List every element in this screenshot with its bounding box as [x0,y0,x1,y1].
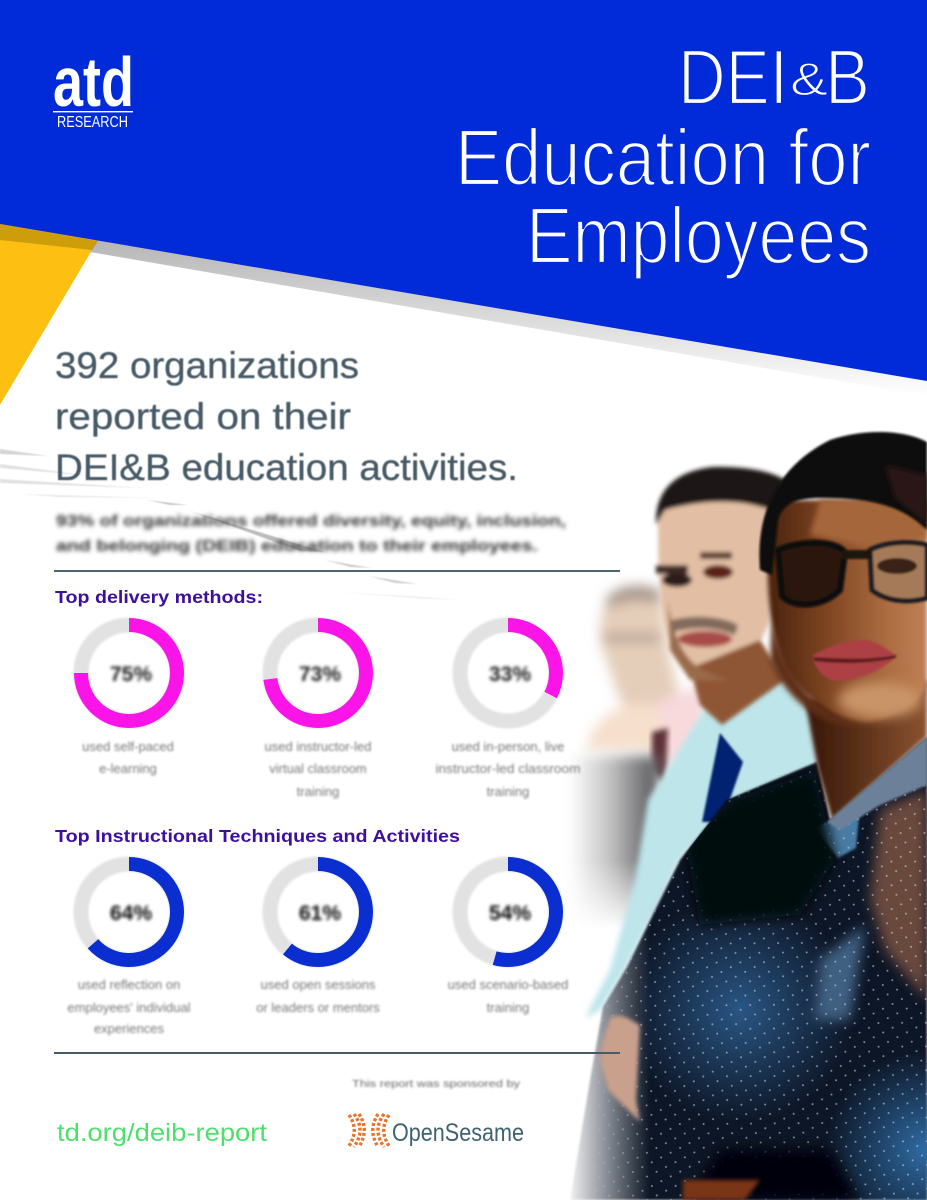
label: method 2: used instructor-led [265,739,371,754]
label: method 2 [265,739,371,799]
report url: td.org/deib-report [57,1119,267,1147]
donut: 61% [270,864,366,960]
label: technique 2 [256,977,380,1015]
title: & [790,53,828,105]
donut: 33% [460,625,556,721]
label: technique 3 [448,977,568,1015]
donut: 73%: 73% [299,663,341,686]
woman's lips [812,640,897,681]
title: Employees [526,191,871,280]
back man [585,585,708,770]
label: technique 2: or leaders or mentors [256,1000,380,1015]
donut: 33%: 33% [489,663,531,686]
label: method 3: training [487,784,529,799]
woman's collar [827,737,927,830]
title [455,33,871,280]
donut: 73% [270,625,366,721]
sponsor note: This report was sponsored by [352,1078,521,1090]
logo: ATD Research: atd [53,43,134,121]
main heading: DEI&B education activities. [55,447,518,488]
label: method 2: virtual classroom [269,761,367,776]
title: B [825,33,870,121]
label: method 1: used self-paced [82,739,174,754]
label: technique 1: employees' individual [67,1000,191,1015]
woman's head [759,432,927,727]
donut: 64% [81,864,177,960]
title: Education for [455,113,871,202]
intro text: 93% of organizations offered diversity, equity, inclusion, [56,513,566,530]
main heading: 392 organizations [55,345,359,386]
donut: 54%: 54% [489,902,531,925]
donut: 75% [81,625,177,721]
donut: 54% [460,864,556,960]
woman's hand [600,1016,640,1122]
label: method 1 [82,739,174,776]
sponsor logo text: OpenSesame [392,1119,524,1147]
woman's shirt [570,737,927,1200]
donut: 64%: 64% [110,902,152,925]
middle man tie [702,733,743,822]
woman's glasses [778,543,927,605]
label: method 3: instructor-led classroom [436,761,580,776]
label: method 3 [436,739,580,799]
heading: top delivery methods: Top delivery methods: [55,587,263,607]
label: method 1: e-learning [99,761,157,776]
back man's jacket [570,756,660,932]
decorative yellow wedge [0,222,98,405]
middle man head [656,467,785,725]
donut: 61%: 61% [299,902,341,925]
label: method 3: used in-person, live [452,739,564,754]
photo: three professionals [570,432,927,1200]
logo: ATD Research: RESEARCH [57,114,128,131]
middle man shirt [585,670,817,1018]
label: technique 2: used open sessions [261,977,376,992]
blue header banner [0,0,927,381]
woman's neck [805,680,927,820]
label: method 2: training [297,784,339,799]
intro text [56,513,566,555]
label: technique 1: experiences [94,1021,165,1036]
main heading [55,345,518,488]
main heading: reported on their [55,396,351,437]
divider lines [54,570,620,572]
heading: top instructional techniques: Top Instructional Techniques and Activities [55,826,460,846]
donut: 75%: 75% [110,663,152,686]
label: technique 3: training [487,1000,529,1015]
intro text: and belonging (DEIB) education to their employees. [56,538,538,555]
label: technique 3: used scenario-based [448,977,568,992]
label: technique 1: used reflection on [78,977,180,992]
label: technique 1 [67,977,191,1036]
title: DEI [678,33,788,121]
icon: OpenSesame logo mark [349,1114,389,1147]
